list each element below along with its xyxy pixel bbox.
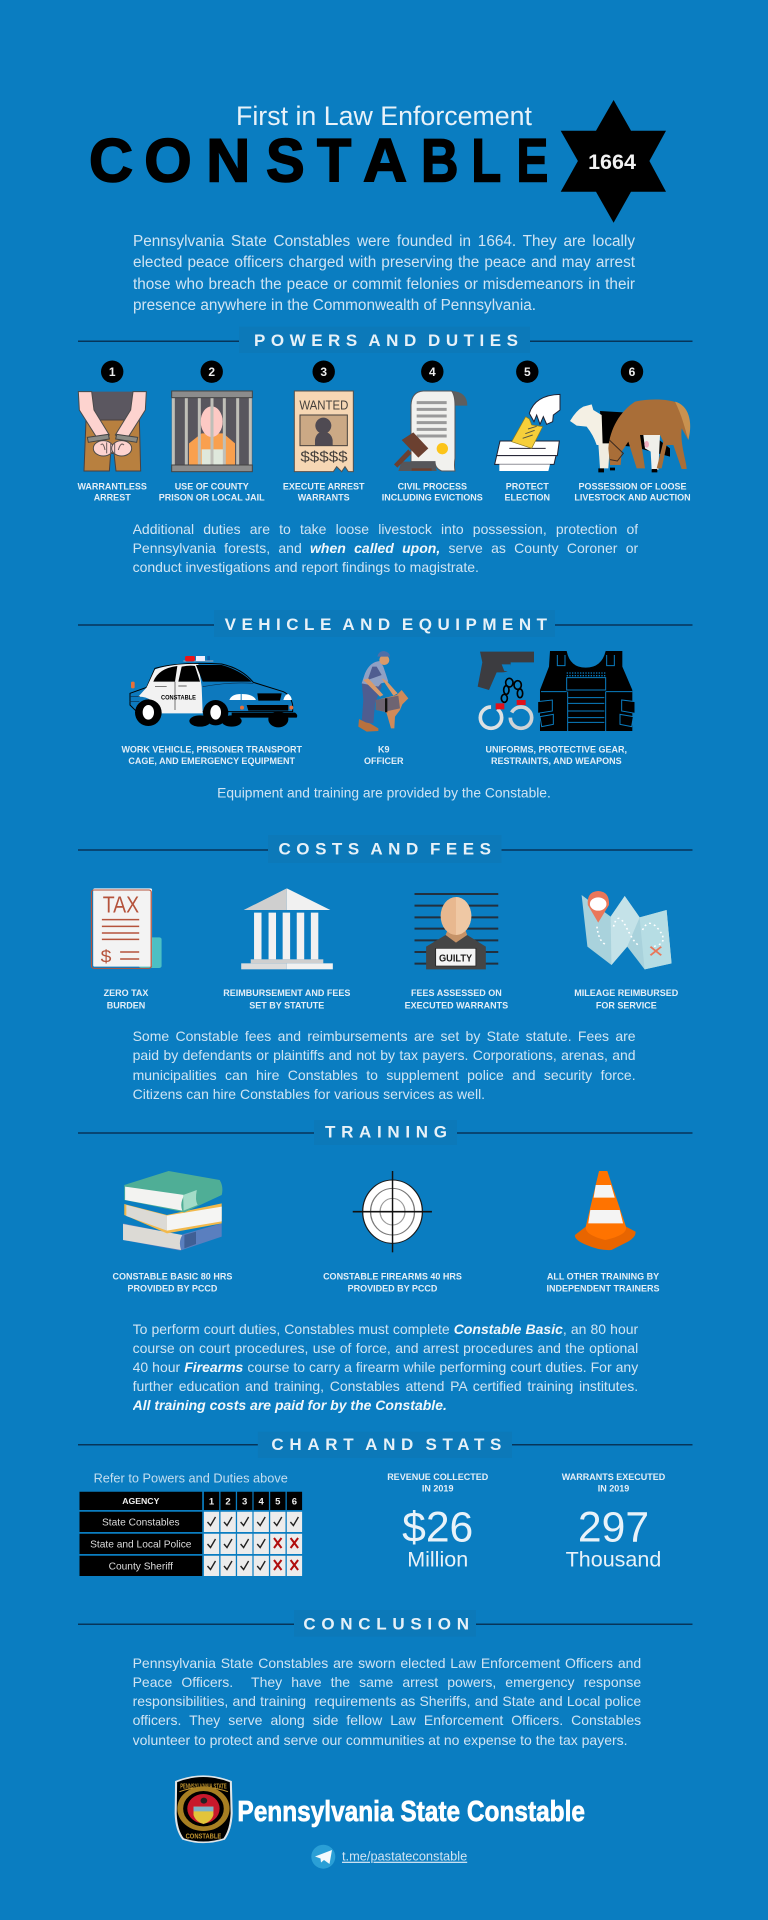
- heading: powers and duties: [239, 327, 530, 353]
- icon: traffic cone: [575, 1171, 636, 1250]
- captions: costs: [104, 988, 679, 1011]
- number badges: [101, 360, 643, 383]
- title: T: [317, 127, 351, 195]
- number badges: 3: [320, 365, 327, 379]
- text: training paragraph: 40 hour Firearms course to carry a firearm while performing court duties. For any: [133, 1359, 638, 1375]
- icon: wanted poster: [294, 391, 353, 472]
- intro text: [133, 231, 635, 319]
- text: conclusion paragraph: [133, 1654, 641, 1752]
- captions: costs: ZERO TAX: [104, 988, 148, 998]
- icon: tax form: $: [101, 948, 112, 967]
- captions: costs: REIMBURSEMENT AND FEES: [223, 988, 350, 998]
- captions: costs: EXECUTED WARRANTS: [405, 1001, 508, 1011]
- captions: vehicle and equipment: WORK VEHICLE, PRISONER TRANSPORT: [121, 745, 302, 755]
- panel: header and intro: [89, 100, 666, 314]
- icon: K9 officer: [358, 651, 408, 732]
- text: conclusion paragraph: Pennsylvania State Constables are sworn elected Law Enforcement Officers and: [133, 1655, 641, 1671]
- heading: conclusion: [294, 1610, 476, 1637]
- text: additional duties: Pennsylvania forests, and when called upon, serve as County Coroner or: [133, 540, 638, 556]
- title: L: [471, 126, 501, 195]
- panel: powers and duties: [77, 331, 692, 575]
- title: E: [516, 126, 548, 195]
- captions: powers: CIVIL PROCESS: [398, 481, 467, 491]
- stat: warrants executed: WARRANTS EXECUTED: [562, 1472, 665, 1482]
- text: costs paragraph: paid by defendants or plaintiffs and not by tax payers. Corporations, arenas, and: [133, 1047, 636, 1063]
- intro text: Pennsylvania State Constables were founded in 1664. They are locally: [133, 233, 635, 250]
- comparison table: AGENCY: [122, 1496, 160, 1506]
- intro text: presence anywhere in the Commonwealth of Pennsylvania.: [133, 297, 536, 314]
- captions: training: PROVIDED BY PCCD: [348, 1284, 438, 1294]
- captions: costs: SET BY STATUTE: [249, 1001, 324, 1011]
- number badges: 1: [109, 365, 116, 379]
- comparison table: 4: [259, 1496, 265, 1507]
- icon: constable badge: PENNSYLVANIA STATE: [180, 1782, 227, 1790]
- link: telegram address: t.me/pastateconstable: [342, 1849, 467, 1864]
- captions: powers: ELECTION: [505, 493, 550, 503]
- icon: constable badge: [176, 1776, 232, 1842]
- text: additional duties: [133, 520, 638, 580]
- text: conclusion paragraph: officers. They serve along side fellow Law Enforcement Officers. Constables: [133, 1712, 641, 1728]
- captions: powers: PRISON OR LOCAL JAIL: [159, 493, 265, 503]
- captions: training: [112, 1271, 660, 1294]
- stat: warrants executed: IN 2019: [598, 1484, 629, 1494]
- comparison table: 5: [275, 1496, 281, 1507]
- icon: courthouse: [241, 888, 333, 969]
- captions: training: INDEPENDENT TRAINERS: [546, 1284, 660, 1294]
- stat: warrants executed: [562, 1472, 666, 1572]
- icon: wanted poster: $$$$$: [300, 450, 348, 466]
- captions: vehicle and equipment: CAGE, AND EMERGENCY EQUIPMENT: [128, 756, 295, 766]
- text: training paragraph: [133, 1320, 638, 1418]
- heading: conclusion: CONCLUSION: [303, 1614, 469, 1633]
- heading: training: TRAINING: [325, 1123, 447, 1142]
- captions: powers: EXECUTE ARREST: [283, 481, 365, 491]
- text: costs paragraph: Some Constable fees and reimbursements are set by State statute. Fees are: [133, 1028, 636, 1044]
- text: costs paragraph: Citizens can hire Constables for various services as well.: [133, 1086, 485, 1102]
- heading: powers and duties: POWERS AND DUTIES: [254, 331, 518, 350]
- captions: powers: USE OF COUNTY: [175, 481, 249, 491]
- stat: warrants executed: 297: [578, 1504, 649, 1552]
- stat: revenue collected: $26: [402, 1504, 473, 1552]
- captions: vehicle and equipment: OFFICER: [364, 756, 404, 766]
- icon: police car: CONSTABLE: [161, 695, 196, 701]
- intro text: those who breach the peace or commit felonies or misdemeanors in their: [133, 276, 635, 293]
- icon: tax form: TAX: [103, 893, 139, 918]
- captions: vehicle and equipment: K9: [378, 745, 390, 755]
- captions: powers: [77, 481, 691, 503]
- comparison table: 2: [225, 1496, 231, 1507]
- title: O: [144, 126, 192, 194]
- captions: powers: INCLUDING EVICTIONS: [382, 493, 483, 503]
- title: S: [266, 126, 305, 195]
- chart note: Refer to Powers and Duties above: [94, 1471, 288, 1486]
- icon: gun, handcuffs and tactical vest: [478, 651, 635, 731]
- heading: costs and fees: [268, 835, 502, 863]
- text: additional duties: conduct investigations and report findings to magistrate.: [133, 559, 479, 575]
- comparison table: [80, 1492, 302, 1576]
- comparison table: State and Local Police: [90, 1540, 192, 1550]
- heading: vehicle and equipment: [214, 610, 555, 637]
- text: costs paragraph: municipalities can hire Constables to supplement police and security force.: [133, 1067, 636, 1083]
- stat: revenue collected: IN 2019: [422, 1484, 453, 1494]
- captions: training: CONSTABLE BASIC 80 HRS: [112, 1271, 232, 1281]
- captions: vehicle and equipment: [121, 745, 627, 766]
- icon: guilty mugshot: [415, 894, 498, 969]
- stat: warrants executed: Thousand: [566, 1548, 661, 1572]
- icon: handcuffed arrest: [78, 392, 146, 471]
- heading: chart and stats: [258, 1432, 512, 1458]
- panel: vehicle and equipment: [78, 615, 692, 800]
- number badges: 5: [524, 365, 531, 379]
- icon: civil process scroll and gavel: [394, 391, 467, 471]
- icon: map with pin: [582, 891, 672, 969]
- captions: vehicle and equipment: UNIFORMS, PROTECTIVE GEAR,: [486, 745, 627, 755]
- panel: training: [78, 1123, 692, 1413]
- heading: vehicle and equipment: VEHICLE AND EQUIPMENT: [225, 615, 548, 634]
- icon: constable badge: CONSTABLE: [186, 1832, 222, 1840]
- comparison table: 3: [242, 1496, 247, 1507]
- title: N: [206, 126, 250, 194]
- subtitle: First in Law Enforcement: [236, 101, 533, 131]
- number badges: 6: [629, 365, 636, 379]
- number badges: 2: [208, 365, 215, 379]
- icon: police car: [129, 656, 297, 727]
- intro text: elected peace officers charged with preserving the peace and may arrest: [133, 254, 635, 271]
- comparison table: State Constables: [102, 1518, 180, 1528]
- text: costs paragraph: [133, 1027, 636, 1107]
- icon: stack of books: [123, 1171, 222, 1251]
- icon: telegram: [311, 1845, 335, 1869]
- comparison table: County Sheriff: [109, 1562, 173, 1572]
- icon: jail cell: [172, 391, 252, 472]
- stat: revenue collected: [387, 1472, 489, 1572]
- panel: conclusion: [78, 1614, 692, 1748]
- captions: powers: WARRANTLESS: [77, 481, 147, 491]
- captions: powers: LIVESTOCK AND AUCTION: [574, 493, 691, 503]
- title: [89, 126, 548, 195]
- text: training paragraph: further education and training, Constables attend PA certified training institutes.: [133, 1378, 638, 1394]
- captions: powers: POSSESSION OF LOOSE: [578, 481, 687, 491]
- panel: footer: [174, 1775, 585, 1869]
- captions: powers: PROTECT: [506, 481, 549, 491]
- captions: training: ALL OTHER TRAINING BY: [547, 1271, 659, 1281]
- comparison table: 1: [209, 1496, 215, 1507]
- captions: powers: WARRANTS: [298, 493, 350, 503]
- text: training paragraph: To perform court duties, Constables must complete Constable Basic, an 80 hour: [133, 1321, 638, 1337]
- stat: revenue collected: Million: [407, 1548, 468, 1572]
- captions: costs: BURDEN: [107, 1001, 145, 1011]
- icon: six-pointed star badge: 1664: [588, 150, 636, 174]
- text: conclusion paragraph: Peace Officers. They have the same arrest powers, emergency response: [133, 1674, 641, 1690]
- captions: vehicle and equipment: RESTRAINTS, AND WEAPONS: [491, 756, 622, 766]
- icon: tax form: [92, 888, 162, 968]
- captions: costs: FEES ASSESSED ON: [411, 988, 502, 998]
- comparison table: 6: [292, 1496, 297, 1507]
- heading: training: [314, 1120, 457, 1145]
- title: A: [363, 126, 407, 194]
- title: C: [89, 126, 133, 194]
- captions: costs: FOR SERVICE: [596, 1001, 657, 1011]
- stat: revenue collected: REVENUE COLLECTED: [387, 1472, 488, 1482]
- icon: ballot and hand: [495, 394, 560, 471]
- icon: firearms target: [353, 1171, 432, 1252]
- captions: training: CONSTABLE FIREARMS 40 HRS: [323, 1271, 462, 1281]
- text: training paragraph: course on court procedures, use of force, and arrest procedures and the optional: [133, 1340, 638, 1356]
- icon: wanted poster: WANTED: [299, 398, 348, 412]
- captions: powers: ARREST: [94, 493, 131, 503]
- captions: costs: MILEAGE REIMBURSED: [574, 988, 678, 998]
- heading: chart and stats: CHART AND STATS: [271, 1435, 501, 1454]
- number badges: 4: [429, 365, 436, 379]
- panel: costs and fees: [78, 840, 692, 1102]
- text: conclusion paragraph: responsibilities, and training requirements as Sheriffs, and State and Local police: [133, 1693, 641, 1709]
- panel: chart and stats: [78, 1435, 692, 1576]
- text: conclusion paragraph: volunteer to protect and serve our communities at no expense to the tax payers.: [133, 1732, 628, 1748]
- captions: training: PROVIDED BY PCCD: [127, 1284, 218, 1294]
- text: training paragraph: All training costs are paid for by the Constable.: [133, 1397, 447, 1413]
- icon: cow and horse: [570, 400, 690, 472]
- text: additional duties: Additional duties are to take loose livestock into possession, protection of: [133, 521, 638, 537]
- icon: guilty mugshot: GUILTY: [439, 953, 473, 964]
- title: B: [421, 126, 458, 194]
- text: equipment note: Equipment and training are provided by the Constable.: [217, 785, 551, 800]
- heading: costs and fees: COSTS AND FEES: [278, 840, 491, 858]
- icon: six-pointed star badge: [561, 100, 666, 223]
